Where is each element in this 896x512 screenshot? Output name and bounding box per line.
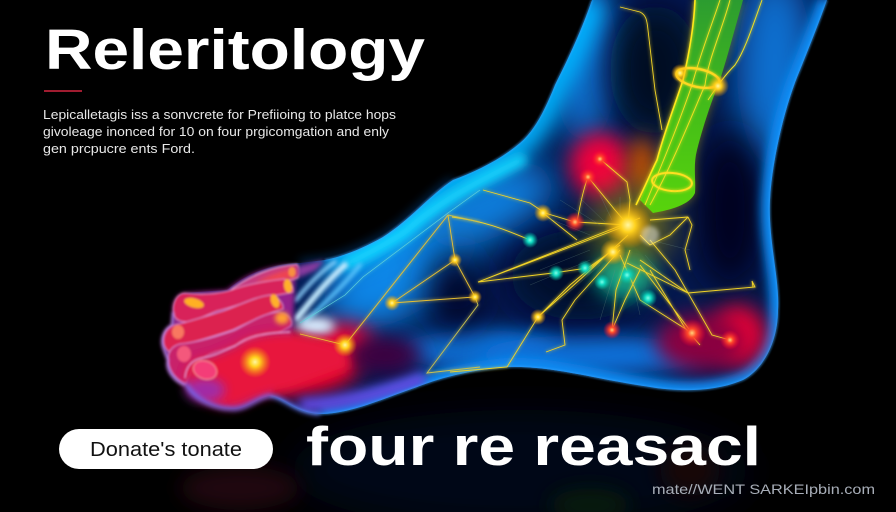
foot body [162,0,827,414]
third toe [163,295,283,351]
glowing nerve nodes [239,150,740,378]
soft outer halo [300,180,453,263]
website url: mate//WENT SARKEIpbin.com [652,481,875,497]
toes [162,260,350,414]
foot colour fields [220,0,827,414]
red inflamed zones [570,133,630,197]
glowing skin edge [325,0,592,260]
description text [43,107,397,156]
fourth toe [173,279,293,322]
description text: givoleage inonced for 10 on four prgicomgation and enly [43,124,390,139]
sharp rim line [270,0,827,414]
floor reflection of the foot [180,410,750,512]
toe silhouette under-colour [162,265,296,409]
leg bone [636,0,762,213]
red accent rule [44,90,82,92]
bone rings [675,65,721,91]
title: Releritology [45,18,425,82]
large slogan: four re reasacl [306,415,761,477]
teal core [595,251,655,299]
toenails [172,267,296,383]
toe tint and rims [185,378,225,402]
nerve lines [450,7,755,372]
fine burst hairs [530,195,690,320]
left nerve network [300,190,480,373]
little toe [228,264,299,292]
big toe [185,332,350,407]
white-blue highlight between the toes [296,262,360,322]
description text: Lepicalletagis iss a sonvcrete for Prefiioing to platce hops [43,107,397,122]
description text: gen prcpucre ents Ford. [43,141,195,156]
foot illustration [162,0,827,414]
second toe [168,312,292,384]
donate button [59,429,273,469]
donate button: Donate's tonate [90,439,242,461]
